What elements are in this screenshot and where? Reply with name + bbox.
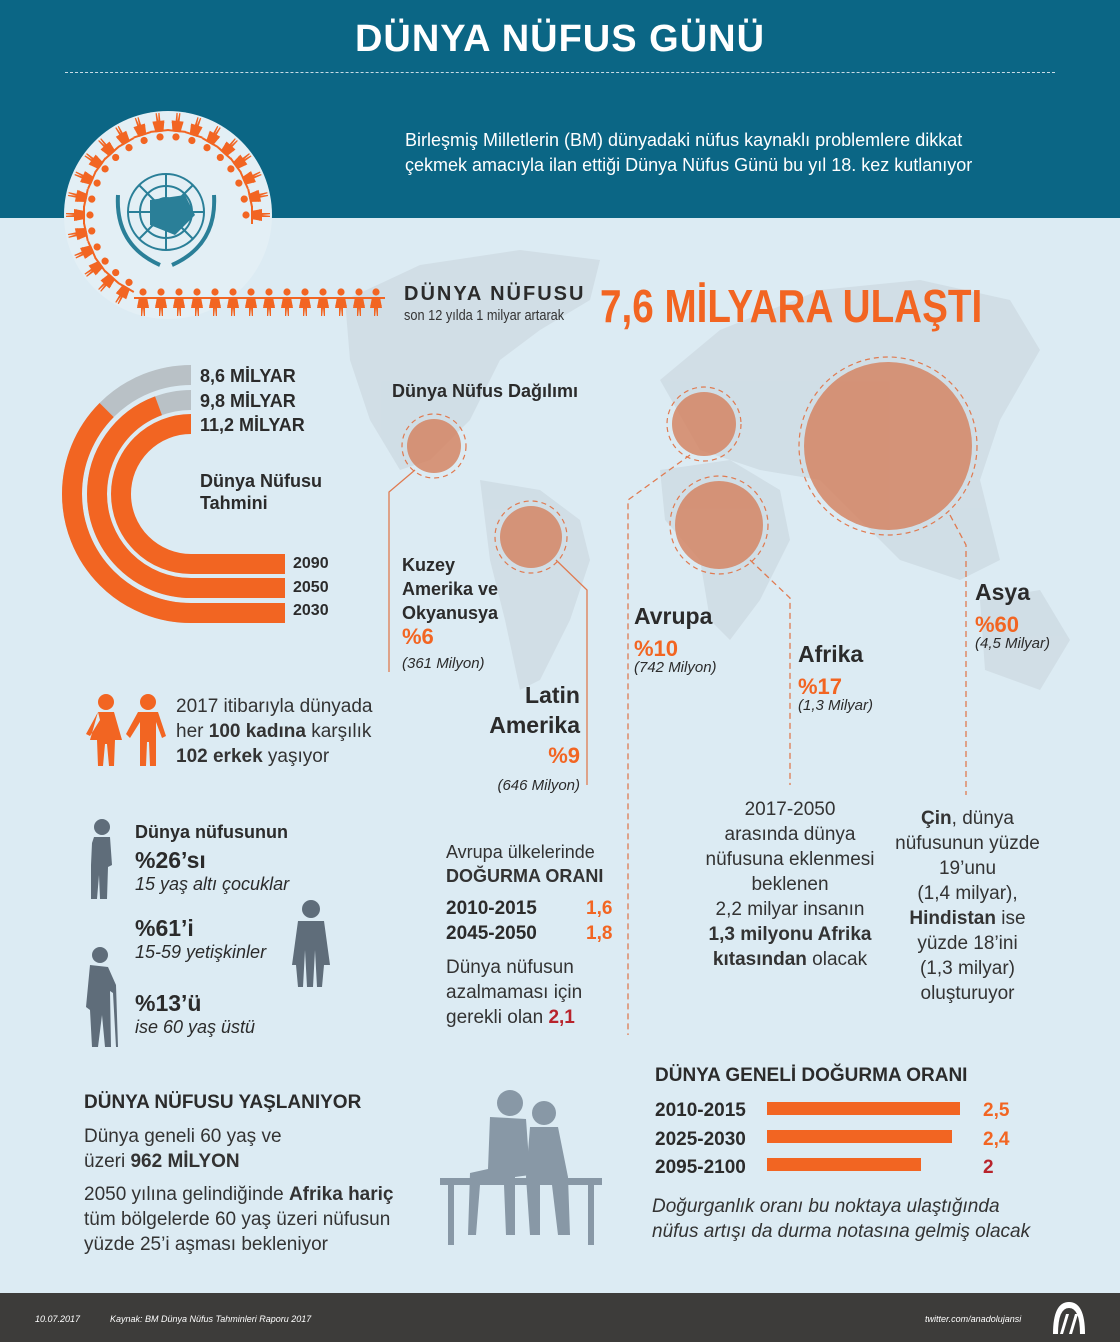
Europe fertility: 2045-2050 [446, 923, 537, 944]
label: Africa: Afrika [798, 641, 863, 667]
China India note: nüfusunun yüzde [895, 833, 1040, 854]
label: North America: Okyanusya [402, 603, 498, 623]
Africa growth note: 2017-2050 [745, 799, 835, 820]
world fertility bar chart: 2095-2100 [655, 1157, 746, 1178]
footer [0, 1293, 1120, 1342]
label: North America: %6 [402, 624, 434, 649]
chart: population forecast rings: Tahmini [200, 493, 268, 513]
icon: AA logo [1053, 1302, 1085, 1334]
aging section [84, 1091, 393, 1255]
gender ratio: her 100 kadına karşılık [176, 721, 371, 742]
chart: population forecast rings: 2030 [293, 602, 329, 619]
label: North America: Kuzey [402, 555, 455, 575]
footer: 10.07.2017 [35, 1314, 80, 1324]
age structure: ise 60 yaş üstü [135, 1017, 255, 1037]
chart: population forecast rings: 9,8 MİLYAR [200, 390, 296, 410]
headline [404, 280, 982, 332]
fertility note [652, 1196, 1031, 1242]
fertility note: nüfus artışı da durma notasına gelmiş olacak [652, 1221, 1030, 1242]
headline: son 12 yılda 1 milyar artarak [404, 307, 564, 324]
Europe fertility: DOĞURMA ORANI [446, 866, 603, 886]
China India note: oluşturuyor [920, 983, 1014, 1004]
Europe fertility: gerekli olan 2,1 [446, 1007, 575, 1028]
Europe fertility: azalmaması için [446, 982, 582, 1003]
aging section: üzeri 962 MİLYON [84, 1151, 240, 1172]
title: DÜNYA NÜFUS GÜNÜ [355, 18, 765, 60]
footer: twitter.com/anadolujansi [925, 1314, 1021, 1324]
Africa growth note: 1,3 milyonu Afrika [709, 924, 871, 945]
world fertility bar chart: 2,4 [983, 1128, 1009, 1150]
chart: population forecast rings: 8,6 MİLYAR [200, 366, 296, 386]
headline: 7,6 MİLYARA ULAŞTI [600, 280, 982, 332]
chart: population forecast rings: 11,2 MİLYAR [200, 415, 305, 435]
label: Latin America: %9 [548, 743, 580, 768]
Africa growth note: nüfusuna eklenmesi [706, 849, 874, 870]
fertility note: Doğurganlık oranı bu noktaya ulaştığında [652, 1196, 1000, 1217]
age structure: %61’i [135, 915, 194, 941]
aging section: tüm bölgelerde 60 yaş üzeri nüfusun [84, 1209, 390, 1230]
label: North America [402, 555, 498, 672]
icon: child, adult, elderly [86, 819, 330, 1047]
China India note: (1,3 milyar) [920, 958, 1015, 979]
map circles and leader lines [388, 356, 978, 1035]
age structure [86, 819, 330, 1047]
Europe fertility: 1,8 [586, 923, 612, 944]
headline: DÜNYA NÜFUSU [404, 283, 585, 305]
aging section: yüzde 25’i aşması bekleniyor [84, 1234, 328, 1255]
Africa growth note: 2,2 milyar insanın [716, 899, 864, 920]
world fertility bar chart: 2,5 [983, 1100, 1009, 1121]
label: Latin America: Latin [525, 682, 580, 708]
label: North America: (361 Milyon) [402, 655, 485, 672]
age structure: 15-59 yetişkinler [135, 942, 266, 962]
label: Europe: %10 [634, 636, 678, 661]
Europe fertility: Avrupa ülkelerinde [446, 842, 595, 862]
Africa growth note: arasında dünya [724, 824, 856, 845]
Africa growth note: kıtasından olacak [713, 949, 867, 970]
heading: distribution: Dünya Nüfus Dağılımı [392, 381, 578, 401]
chart: population forecast rings: 2090 [293, 555, 329, 572]
gender ratio [86, 694, 372, 767]
aging section: DÜNYA NÜFUSU YAŞLANIYOR [84, 1092, 361, 1113]
label: Europe [634, 603, 717, 676]
China India note [895, 808, 1040, 1004]
world fertility bar chart: DÜNYA GENELİ DOĞURMA ORANI [655, 1065, 967, 1086]
world fertility bar chart: 2 [983, 1157, 994, 1178]
intro text: Birleşmiş Milletlerin (BM) dünyadaki nüfus kaynaklı problemlere dikkat çekmek amacıyla ilan ettiği Dünya Nüfus Günü bu yıl 18. kez kutlanıyor [405, 130, 972, 175]
label: Asia: %60 [975, 612, 1019, 637]
label: Africa: %17 [798, 674, 842, 699]
age structure: Dünya nüfusunun [135, 822, 288, 842]
chart: population forecast rings: Dünya Nüfusu [200, 471, 322, 491]
gender ratio: 2017 itibarıyla dünyada [176, 696, 372, 717]
aging section: Dünya geneli 60 yaş ve [84, 1126, 282, 1147]
chart: population forecast rings [62, 365, 329, 623]
header band [0, 0, 1120, 218]
Africa growth note [706, 799, 874, 970]
China India note: yüzde 18’ini [917, 933, 1018, 954]
icon: elderly couple on bench [440, 1090, 602, 1245]
China India note: (1,4 milyar), [917, 883, 1018, 904]
label: Africa: (1,3 Milyar) [798, 697, 873, 714]
logo with people ring [64, 111, 385, 316]
Europe fertility: 2010-2015 [446, 898, 537, 919]
gender ratio: 102 erkek yaşıyor [176, 746, 329, 767]
world fertility bar chart: 2010-2015 [655, 1100, 746, 1121]
label: Latin America: (646 Milyon) [497, 777, 580, 794]
label: Asia: Asya [975, 579, 1030, 605]
icon: woman and man [86, 694, 166, 766]
label: Europe: (742 Milyon) [634, 659, 717, 676]
label: Latin America [489, 682, 580, 794]
Africa growth note: beklenen [751, 874, 829, 895]
label: Latin America: Amerika [489, 712, 580, 738]
chart: population forecast rings: 2050 [293, 578, 329, 596]
Europe fertility: Dünya nüfusun [446, 957, 574, 978]
China India note: Hindistan ise [909, 908, 1026, 929]
China India note: Çin, dünya [921, 808, 1014, 829]
label: North America: Amerika ve [402, 579, 498, 599]
label: Europe: Avrupa [634, 603, 712, 629]
world fertility bar chart: 2025-2030 [655, 1128, 746, 1150]
Europe fertility: 1,6 [586, 898, 612, 919]
label: Africa [798, 641, 873, 714]
aging section: 2050 yılına gelindiğinde Afrika hariç [84, 1184, 393, 1205]
label: Asia: (4,5 Milyar) [975, 635, 1050, 652]
age structure: %13’ü [135, 990, 201, 1016]
age structure: 15 yaş altı çocuklar [135, 874, 289, 894]
label: Asia [975, 579, 1050, 652]
footer: Kaynak: BM Dünya Nüfus Tahminleri Raporu 2017 [110, 1314, 311, 1324]
China India note: 19’unu [939, 858, 996, 879]
age structure: %26’sı [135, 847, 206, 873]
Europe fertility [446, 842, 612, 1028]
world fertility bar chart [655, 1064, 1010, 1178]
